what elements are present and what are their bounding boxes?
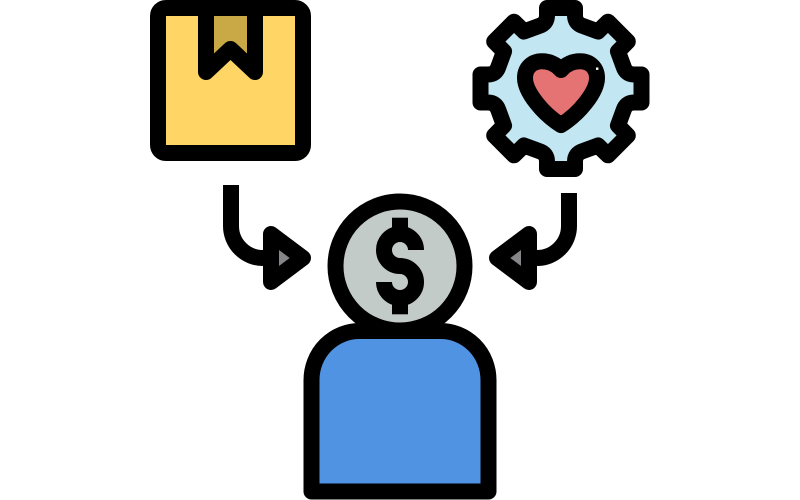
icon: gear with heart <box>480 8 642 169</box>
icon: person body <box>312 331 489 492</box>
heart <box>525 61 597 125</box>
gear <box>480 8 642 169</box>
icon: package box <box>158 8 303 153</box>
icon: package ribbon <box>206 8 255 72</box>
arrow: box to person <box>231 185 303 282</box>
arrow: gear to person <box>497 193 569 282</box>
icon: dollar coin head <box>336 202 464 330</box>
heart highlight dot <box>596 68 598 70</box>
dollar sign <box>384 218 416 314</box>
